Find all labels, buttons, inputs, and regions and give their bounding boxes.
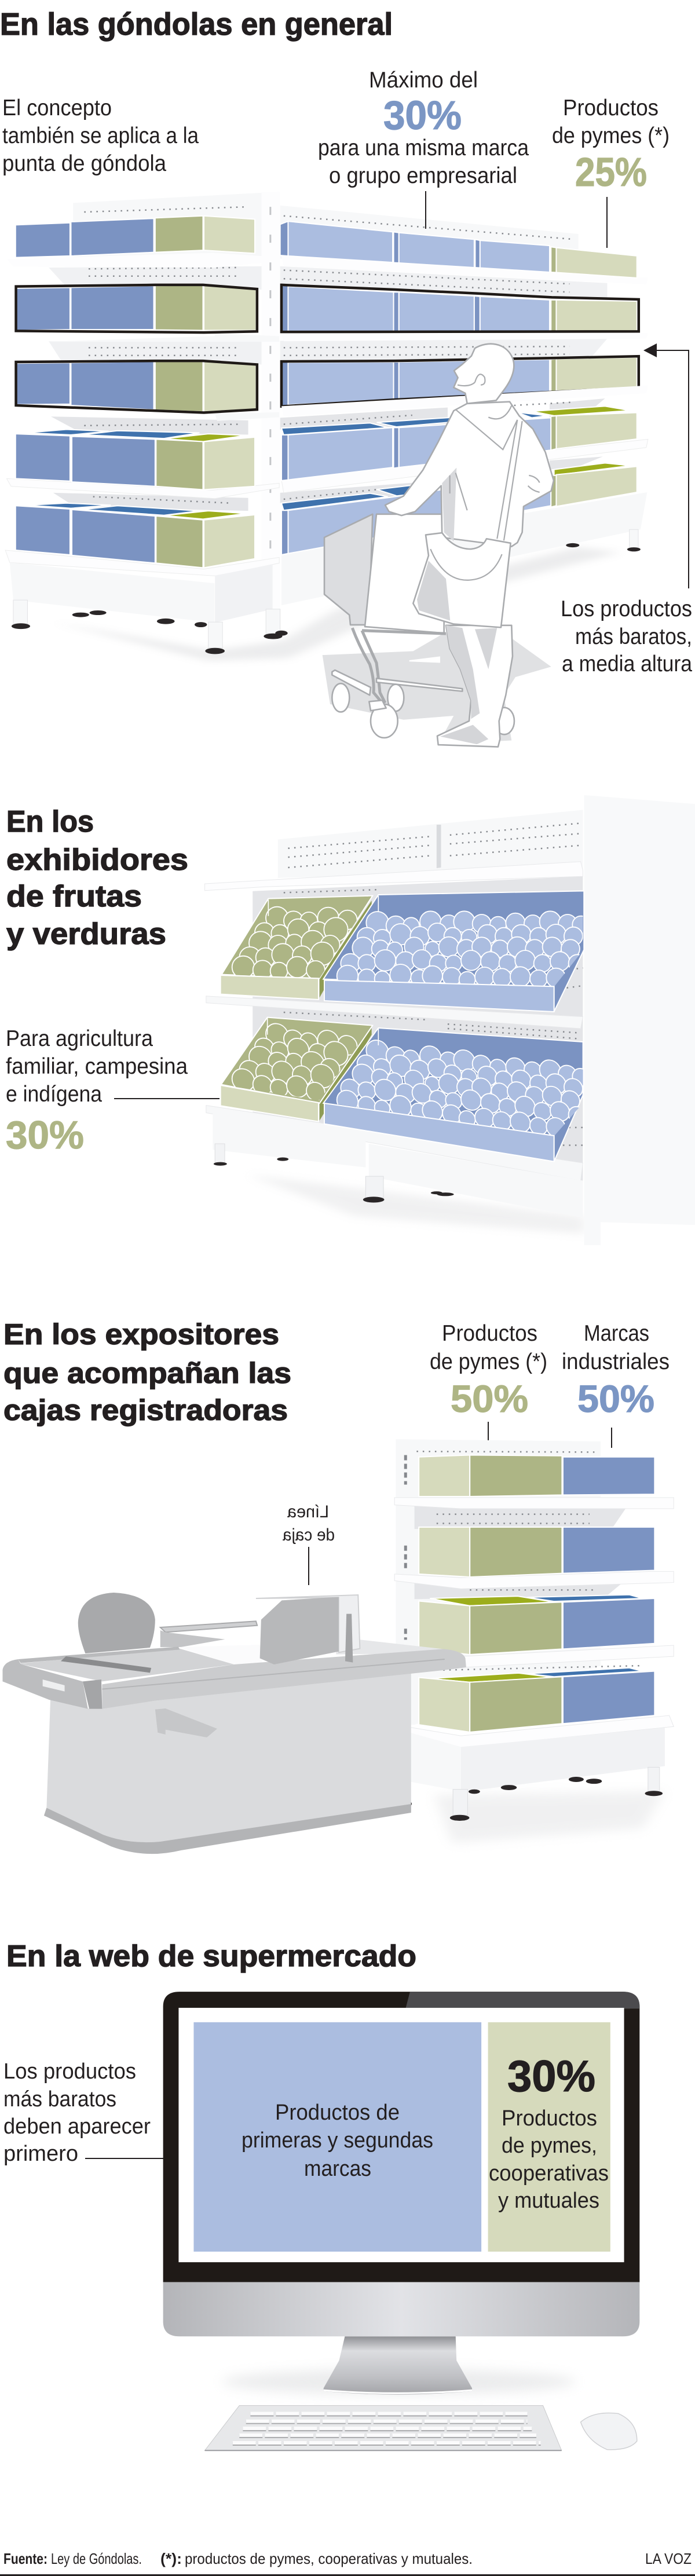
upper blue bin bbox=[323, 891, 590, 1012]
text: más baratos primero: Los productos bbox=[3, 2059, 136, 2084]
stat: pymes 50%: 50% bbox=[451, 1377, 528, 1420]
leader line: marcas 50% bbox=[611, 1428, 612, 1448]
heading: exhibidores: En los bbox=[6, 805, 94, 839]
text: más baratos primero bbox=[3, 2059, 151, 2166]
floor shadow of shopper bbox=[323, 633, 551, 744]
footer: fuente: productos de pymes, cooperativas y mutuales. bbox=[185, 2550, 473, 2567]
screen block: pymes bbox=[488, 2022, 610, 2252]
leader line: productos de pymes 25% bbox=[606, 197, 608, 248]
row 4 boxes bbox=[419, 1668, 654, 1732]
text: primeras y segundas marcas bbox=[242, 2101, 433, 2181]
stat: marcas industriales 50%: Marcas bbox=[584, 1321, 649, 1346]
stat: pymes 25% bbox=[552, 96, 670, 195]
illustration: checkout register bbox=[2, 1593, 466, 1854]
card terminal bracket bbox=[155, 1708, 217, 1737]
row 5 right boxes bbox=[281, 463, 637, 555]
panel: exhibidores de frutas y verduras bbox=[6, 795, 695, 1245]
lower blue bin bbox=[323, 1028, 590, 1162]
leader line: línea de caja bbox=[308, 1547, 309, 1585]
heading: exhibidores: y verduras bbox=[6, 917, 166, 951]
display side panel bbox=[584, 795, 695, 1245]
text: primeras y segundas marcas: Productos de bbox=[275, 2101, 400, 2125]
heading: expositores: En los expositores bbox=[3, 1318, 279, 1351]
monitor stand bbox=[324, 2336, 472, 2395]
text: punta de góndola: también se aplica a la bbox=[2, 123, 199, 148]
row 1 boxes bbox=[419, 1455, 654, 1496]
illustration: shopper with cart bbox=[323, 344, 554, 747]
row 5 left boxes bbox=[16, 503, 255, 568]
chair back bbox=[78, 1593, 155, 1653]
counter top bbox=[18, 1648, 234, 1681]
row 3 boxes bbox=[419, 1595, 654, 1655]
stat: pymes 30% web bbox=[489, 2052, 609, 2213]
arrow: media altura bbox=[643, 343, 689, 588]
row 2 left boxes (media altura) bbox=[16, 285, 256, 330]
lower green bin bbox=[221, 1018, 372, 1122]
stat: pymes 25%: 25% bbox=[575, 149, 647, 195]
mirrored label: línea de caja bbox=[283, 1502, 335, 1545]
heading: expositores: cajas registradoras bbox=[3, 1394, 288, 1426]
panel: web de supermercado bbox=[3, 1940, 639, 2450]
heading: exhibidores: de frutas bbox=[6, 880, 142, 913]
row 2 right boxes (media altura) bbox=[281, 286, 637, 331]
stat: agricultura familiar 30%: familiar, campesina bbox=[6, 1054, 188, 1079]
text: punta de góndola: El concepto bbox=[2, 96, 112, 120]
footer: fuente: Ley de Góndolas. bbox=[51, 2550, 142, 2567]
counter body bbox=[46, 1672, 411, 1851]
stat: marcas industriales 50%: 50% bbox=[577, 1377, 654, 1420]
stat: agricultura familiar 30% bbox=[6, 1026, 188, 1157]
stat: agricultura familiar 30%: e indígena bbox=[6, 1082, 102, 1107]
floor shadow bbox=[53, 547, 620, 661]
screen bbox=[178, 2008, 624, 2262]
row 1 right boxes bbox=[280, 221, 637, 278]
row 4 left boxes bbox=[16, 430, 255, 490]
shopper torso bbox=[385, 402, 554, 547]
mouse bbox=[581, 2413, 637, 2450]
mirrored label: línea de caja: Línea bbox=[287, 1502, 329, 1521]
panel: góndolas en general bbox=[0, 7, 692, 747]
text: más baratos primero: deben aparecer bbox=[3, 2114, 151, 2139]
stat: máximo 30%: o grupo empresarial bbox=[329, 163, 517, 188]
leader line: máximo del 30% bbox=[425, 191, 426, 229]
stat: pymes 25%: Productos bbox=[563, 96, 659, 120]
footer: fuente: Fuente: bbox=[3, 2550, 47, 2567]
stat: máximo 30%: 30% bbox=[383, 93, 462, 138]
stat: pymes 30% web: 30% bbox=[507, 2052, 595, 2101]
illustration: góndola shelves upper rows bbox=[6, 192, 648, 609]
heading: exhibidores: exhibidores bbox=[6, 843, 188, 877]
counter base band bbox=[44, 1804, 411, 1854]
illustration: desktop computer bbox=[163, 1992, 639, 2450]
bagging area bbox=[160, 1621, 257, 1632]
text: punta de góndola: punta de góndola bbox=[2, 151, 166, 176]
scanner box bbox=[256, 1595, 360, 1652]
monitor chin bbox=[163, 2282, 639, 2336]
shopper legs bbox=[437, 625, 514, 747]
panel: expositores de cajas bbox=[2, 1318, 674, 1854]
stat: pymes 50% bbox=[430, 1321, 547, 1420]
stat: máximo 30%: Máximo del bbox=[369, 68, 478, 93]
shelf legs and feet bbox=[12, 529, 641, 654]
footer: fuente: (*): bbox=[160, 2550, 182, 2567]
stat: máximo 30% bbox=[318, 68, 529, 188]
row 3 right boxes (media altura) bbox=[281, 357, 637, 406]
highlight frames bbox=[16, 285, 639, 412]
monitor frame bbox=[163, 1992, 639, 2282]
illustration: góndola shelves lower rows bbox=[5, 386, 648, 661]
stat: pymes 30% web: Productos bbox=[502, 2106, 597, 2131]
stat: pymes 50%: Productos bbox=[442, 1321, 537, 1346]
text: primeras y segundas marcas: marcas bbox=[304, 2157, 371, 2181]
row 2 boxes bbox=[419, 1527, 654, 1577]
shopper bag bbox=[413, 420, 522, 627]
mirrored label: línea de caja: de caja bbox=[283, 1525, 335, 1545]
text: primeras y segundas marcas: primeras y segundas bbox=[242, 2128, 433, 2153]
illustration: fruit display bbox=[205, 795, 695, 1245]
text: más baratos primero: más baratos bbox=[3, 2087, 116, 2112]
fruit bins bbox=[221, 891, 590, 1162]
text: punta de góndola bbox=[2, 96, 199, 176]
stat: pymes 30% web: y mutuales bbox=[498, 2189, 599, 2213]
stat: agricultura familiar 30%: Para agricultura bbox=[6, 1026, 153, 1051]
shopper head bbox=[453, 344, 514, 404]
leader line: pymes 50% bbox=[488, 1422, 489, 1443]
stat: máximo 30%: para una misma marca bbox=[318, 136, 529, 160]
text: más baratos primero: primero bbox=[3, 2142, 78, 2166]
leader line: primero bbox=[85, 2158, 163, 2159]
heading: exhibidores bbox=[6, 805, 188, 951]
illustration: checkout shelf bbox=[394, 1439, 674, 1843]
stat: pymes 25%: de pymes (*) bbox=[552, 123, 670, 148]
upper green bin bbox=[221, 896, 372, 1000]
keyboard bbox=[205, 2406, 562, 2450]
footer: fuente bbox=[3, 2550, 692, 2567]
title: En las góndolas en general: En las góndolas en general bbox=[0, 7, 393, 42]
stat: pymes 50%: de pymes (*) bbox=[430, 1349, 547, 1374]
display legs and feet bbox=[214, 1144, 454, 1203]
stat: pymes 30% web: cooperativas bbox=[489, 2161, 609, 2186]
shelf legs and feet bbox=[405, 1767, 663, 1821]
row 3 left boxes (media altura) bbox=[16, 361, 256, 412]
leader line: agricultura familiar bbox=[114, 1098, 220, 1099]
desk shadow bbox=[222, 2369, 576, 2395]
stat: pymes 30% web: de pymes, bbox=[502, 2134, 597, 2158]
screen block: marcas bbox=[193, 2022, 481, 2252]
text: más baratos a media altura bbox=[561, 597, 692, 676]
stat: marcas industriales 50% bbox=[562, 1321, 670, 1420]
heading: expositores bbox=[3, 1318, 291, 1426]
counter rim bbox=[102, 1649, 466, 1709]
row 4 right boxes bbox=[281, 406, 637, 481]
heading: web: En la web de supermercado bbox=[6, 1940, 416, 1973]
stat: agricultura familiar 30%: 30% bbox=[6, 1113, 84, 1157]
row 1 left boxes bbox=[16, 216, 255, 258]
stat: marcas industriales 50%: industriales bbox=[562, 1349, 670, 1374]
cart bbox=[324, 514, 462, 738]
heading: expositores: que acompañan las bbox=[3, 1357, 291, 1389]
